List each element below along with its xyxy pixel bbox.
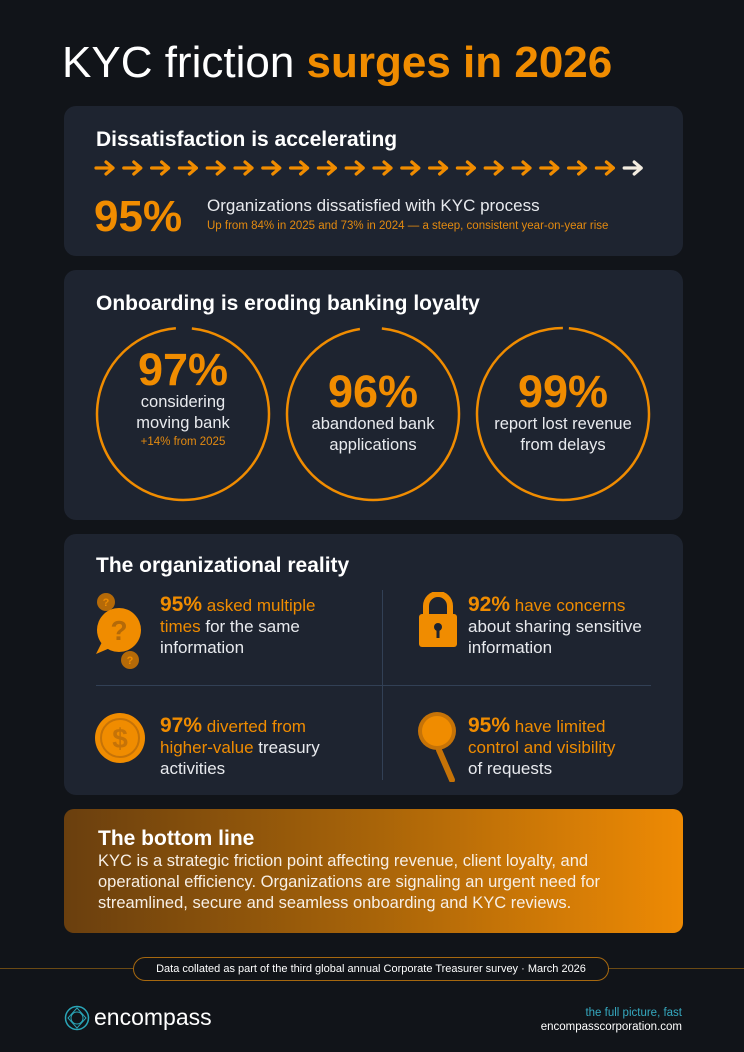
tagline — [541, 1007, 682, 1033]
circle: 97%: considering — [141, 393, 225, 411]
circle: 99%: report lost revenue — [494, 415, 632, 433]
circle: 97%: +14% from 2025 — [141, 436, 225, 448]
icon: question bubbles: ? — [103, 597, 110, 609]
circle: 96% — [286, 327, 460, 502]
circle: 96%: abandoned bank — [312, 415, 434, 433]
heading: The bottom line — [98, 827, 254, 850]
panel: bottom line — [64, 809, 683, 933]
title: KYC friction surges in 2026 — [62, 38, 612, 87]
arrow row — [94, 160, 643, 176]
circle: 97% — [96, 327, 270, 502]
icon: question bubbles: ? — [110, 615, 128, 646]
text: concerns sharing: 92% have concerns about sharing sensitive information — [468, 593, 642, 657]
circle: 96%: 96% — [328, 366, 418, 417]
circle: 99% — [476, 326, 650, 502]
circle: 97%: moving bank — [136, 414, 230, 432]
icon: coin: $ — [112, 723, 128, 754]
logo: encompass — [64, 1004, 212, 1030]
panel: loyalty — [64, 270, 683, 520]
heading: Dissatisfaction is accelerating — [96, 128, 397, 151]
icon: question bubbles: ? — [127, 655, 134, 667]
circle: 99%: from delays — [520, 436, 606, 454]
icon: question bubbles — [96, 593, 141, 669]
panel: organizational reality — [64, 534, 683, 795]
body text: KYC is a strategic friction point affecting revenue, client loyalty, and operational efficiency. Organizations are signaling an urgent need for streamlined, secure and seamless onboarding and KYC reviews. — [98, 852, 600, 912]
icon: coin — [95, 713, 145, 763]
tagline: encompasscorporation.com — [541, 1021, 682, 1033]
text: limited control: 95% have limited control and visibility of requests — [468, 714, 615, 778]
heading: The organizational reality — [96, 554, 349, 577]
text: asked multiple times: 95% asked multiple times for the same information — [160, 593, 315, 657]
icon: magnifier — [418, 712, 456, 782]
icon: padlock — [419, 592, 457, 647]
heading: Onboarding is eroding banking loyalty — [96, 292, 480, 315]
stat text — [207, 196, 608, 232]
tagline: the full picture, fast — [585, 1007, 682, 1019]
panel: dissatisfaction — [64, 106, 683, 256]
footer source pill: Data collated as part of the third global annual Corporate Treasurer survey · March 2026 — [156, 963, 586, 975]
text: diverted: 97% diverted from higher-value treasury activities — [160, 714, 320, 778]
circle: 97%: 97% — [138, 344, 228, 395]
text: encompass — [94, 1004, 212, 1030]
circle: 96%: applications — [329, 436, 417, 454]
divider lines — [382, 590, 383, 780]
stat text: Organizations dissatisfied with KYC process — [207, 196, 540, 215]
stat text: Up from 84% in 2025 and 73% in 2024 — a steep, consistent year-on-year rise — [207, 220, 608, 232]
circle: 99%: 99% — [518, 366, 608, 417]
stat 95%: 95% — [94, 192, 182, 241]
